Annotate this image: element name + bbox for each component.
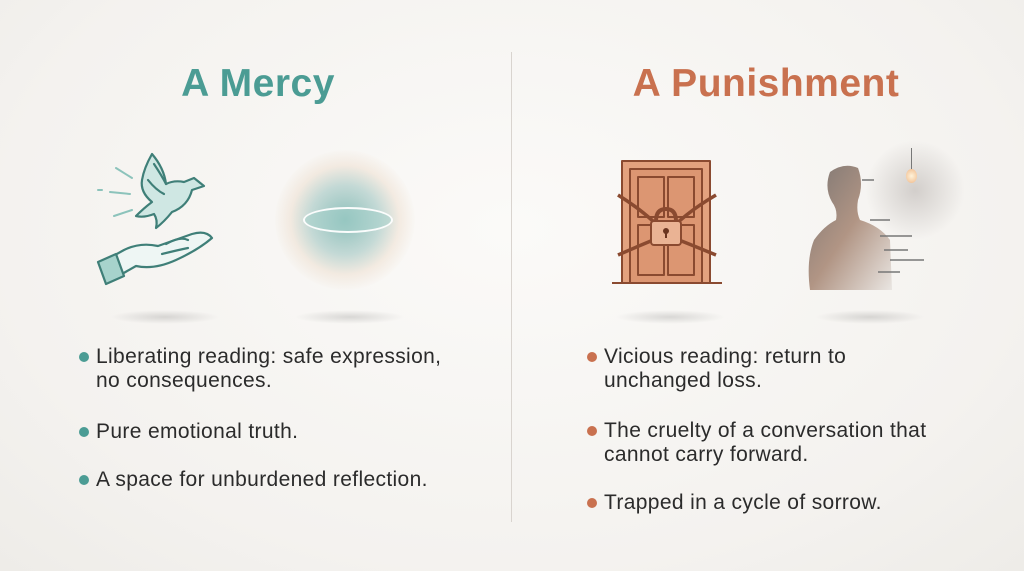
title: A Punishment: A Punishment <box>633 62 899 105</box>
bullet 1: Vicious reading: return to <box>604 345 846 368</box>
bullet 1 <box>79 345 441 392</box>
title: A Mercy: A Mercy <box>181 62 335 105</box>
bullet 1: Liberating reading: safe expression, <box>96 345 441 368</box>
bullet 1: no consequences. <box>96 369 272 392</box>
bullet 2: The cruelty of a conversation that <box>604 419 926 442</box>
bullets: mercy <box>79 345 441 491</box>
shadows right <box>615 310 725 324</box>
bullets: punishment <box>587 345 926 514</box>
icon: fading silhouette with bulb <box>808 148 954 290</box>
bullet 3: A space for unburdened reflection. <box>96 468 428 491</box>
bullet 2: Pure emotional truth. <box>96 420 298 443</box>
bullet 2: cannot carry forward. <box>604 443 809 466</box>
icon: glowing halo <box>281 156 410 284</box>
shadows left <box>110 310 220 324</box>
icon: dove and hand <box>96 152 214 286</box>
bullet 3: Trapped in a cycle of sorrow. <box>604 491 882 514</box>
bullet 1: unchanged loss. <box>604 369 762 392</box>
bullet 1 <box>587 345 846 392</box>
icon: chained door <box>612 160 722 284</box>
bullet 2 <box>587 419 926 466</box>
divider <box>511 52 512 522</box>
